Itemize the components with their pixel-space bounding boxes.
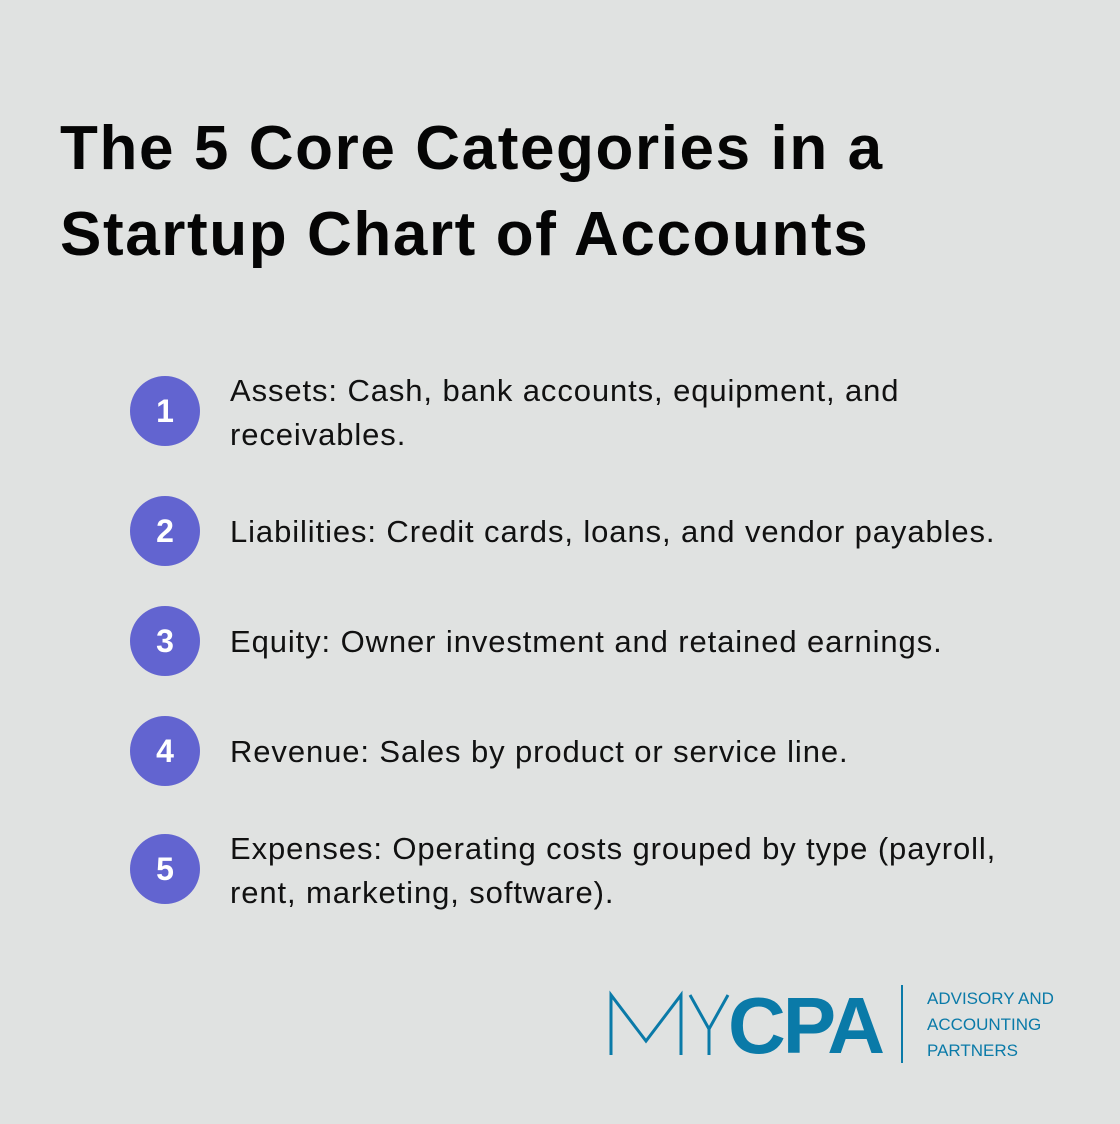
text 2: Liabilities: Credit cards, loans, and vendor payables. [230, 514, 995, 549]
badge 2 [130, 496, 200, 566]
text 4: Revenue: Sales by product or service line. [230, 734, 848, 769]
logo divider [901, 985, 903, 1063]
text 5 [230, 831, 996, 910]
badge 3 [130, 606, 200, 676]
logo tagline: ADVISORY AND [927, 989, 1054, 1008]
text 3: Equity: Owner investment and retained earnings. [230, 624, 943, 659]
text 5: Expenses: Operating costs grouped by type (payroll, [230, 831, 996, 866]
logo MY [611, 995, 728, 1055]
item 3 [130, 606, 943, 676]
text 1: Assets: Cash, bank accounts, equipment, and [230, 373, 899, 408]
logo tagline [927, 989, 1054, 1060]
logo CPA: CPA [728, 981, 882, 1070]
item 4 [130, 716, 848, 786]
title [60, 114, 884, 269]
badge 3: 3 [156, 623, 174, 659]
text 5: rent, marketing, software). [230, 875, 614, 910]
item 1 [130, 373, 899, 452]
badge 4 [130, 716, 200, 786]
item 5 [130, 831, 996, 910]
badge 1 [130, 376, 200, 446]
badge 4: 4 [156, 733, 174, 769]
title: The 5 Core Categories in a [60, 114, 884, 183]
text 1 [230, 373, 899, 452]
logo tagline: ACCOUNTING [927, 1015, 1041, 1034]
badge 2: 2 [156, 513, 174, 549]
text 1: receivables. [230, 417, 406, 452]
badge 5 [130, 834, 200, 904]
badge 5: 5 [156, 851, 174, 887]
badge 1: 1 [156, 393, 174, 429]
title: Startup Chart of Accounts [60, 200, 869, 269]
logo tagline: PARTNERS [927, 1041, 1018, 1060]
logo [610, 981, 1054, 1070]
item 2 [130, 496, 995, 566]
